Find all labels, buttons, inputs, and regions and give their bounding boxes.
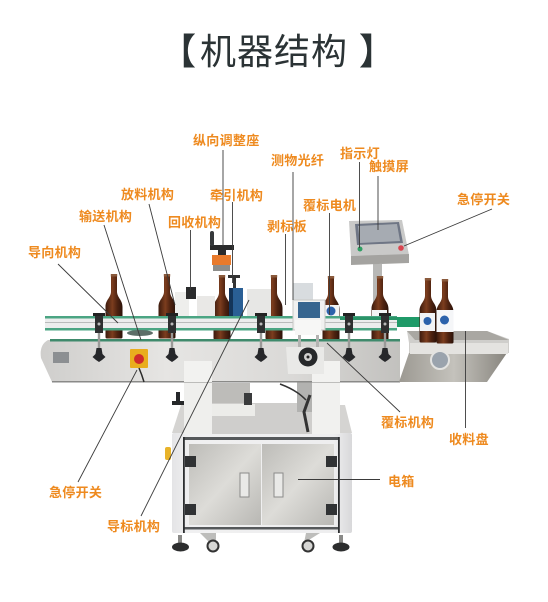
left switch plate xyxy=(53,352,69,363)
guide rails and belt xyxy=(45,316,437,342)
title: 机器结构 xyxy=(200,31,348,72)
callout: 急停开关 (top): 急停开关 xyxy=(457,192,510,207)
side button xyxy=(165,447,171,460)
emergency stop box xyxy=(130,349,148,382)
callout: 导标机构: 导标机构 xyxy=(107,519,160,534)
adjuster handle xyxy=(172,392,184,403)
callout: 牵引机构 xyxy=(210,188,263,283)
label roll station xyxy=(175,231,271,316)
machine illustration xyxy=(41,220,509,552)
callout: 纵向调整座 xyxy=(193,133,260,246)
callout: 输送机构: 输送机构 xyxy=(79,209,132,224)
callout: 覆标机构 xyxy=(327,343,434,430)
bottles on conveyor xyxy=(106,274,388,340)
label applicator xyxy=(286,283,325,374)
applicator wheel xyxy=(298,348,318,366)
control panel xyxy=(349,220,409,314)
callout: 急停开关 (bottom): 急停开关 xyxy=(49,485,102,500)
callout: 覆标电机: 覆标电机 xyxy=(303,198,356,213)
callout: 电箱 xyxy=(298,474,415,489)
callout: 覆标机构: 覆标机构 xyxy=(381,415,434,430)
callout: 输送机构 xyxy=(79,209,141,340)
callout: 牵引机构: 牵引机构 xyxy=(210,188,263,203)
callout: 收料盘 xyxy=(449,331,489,447)
door hinges xyxy=(185,456,337,515)
callout: 放料机构 xyxy=(121,187,175,305)
callout: 覆标电机 xyxy=(303,198,356,315)
conveyor body xyxy=(41,340,400,382)
left support plate xyxy=(184,361,212,434)
callout: 剥标板: 剥标板 xyxy=(267,219,307,234)
callout: 回收机构 xyxy=(168,215,221,290)
feet and casters xyxy=(172,533,350,552)
callout: 导标机构 xyxy=(107,300,249,534)
rail clamps xyxy=(92,313,392,362)
cabinet doors xyxy=(189,444,334,525)
callout: 急停开关 (bottom) xyxy=(49,370,137,500)
callout: 收料盘: 收料盘 xyxy=(449,432,489,447)
callout: 回收机构: 回收机构 xyxy=(168,215,221,230)
title xyxy=(160,31,395,72)
support plate tops over body xyxy=(184,361,340,382)
gauge xyxy=(431,351,449,369)
callout: 导向机构: 导向机构 xyxy=(28,245,81,260)
title: 】 xyxy=(359,31,395,72)
callout: 纵向调整座: 纵向调整座 xyxy=(193,133,260,148)
finished bottles at tray xyxy=(420,278,454,344)
callout: 触摸屏 xyxy=(369,159,409,230)
cabinet base xyxy=(165,405,352,552)
callout: 测物光纤: 测物光纤 xyxy=(271,153,324,168)
callout: 指示灯 xyxy=(340,146,380,248)
callout: 导向机构 xyxy=(28,245,118,323)
callout: 触摸屏: 触摸屏 xyxy=(369,159,409,174)
callout: 放料机构: 放料机构 xyxy=(121,187,174,202)
callout: 急停开关 (top) xyxy=(404,192,510,246)
collecting tray xyxy=(399,331,509,382)
callout: 剥标板 xyxy=(267,219,307,305)
indicator light xyxy=(358,246,362,252)
callout: 电箱: 电箱 xyxy=(388,474,415,489)
title: 【 xyxy=(160,31,196,72)
right support plate xyxy=(312,361,340,434)
stop button xyxy=(398,245,404,251)
center mechanism xyxy=(212,382,313,434)
callout: 指示灯: 指示灯 xyxy=(340,146,380,161)
